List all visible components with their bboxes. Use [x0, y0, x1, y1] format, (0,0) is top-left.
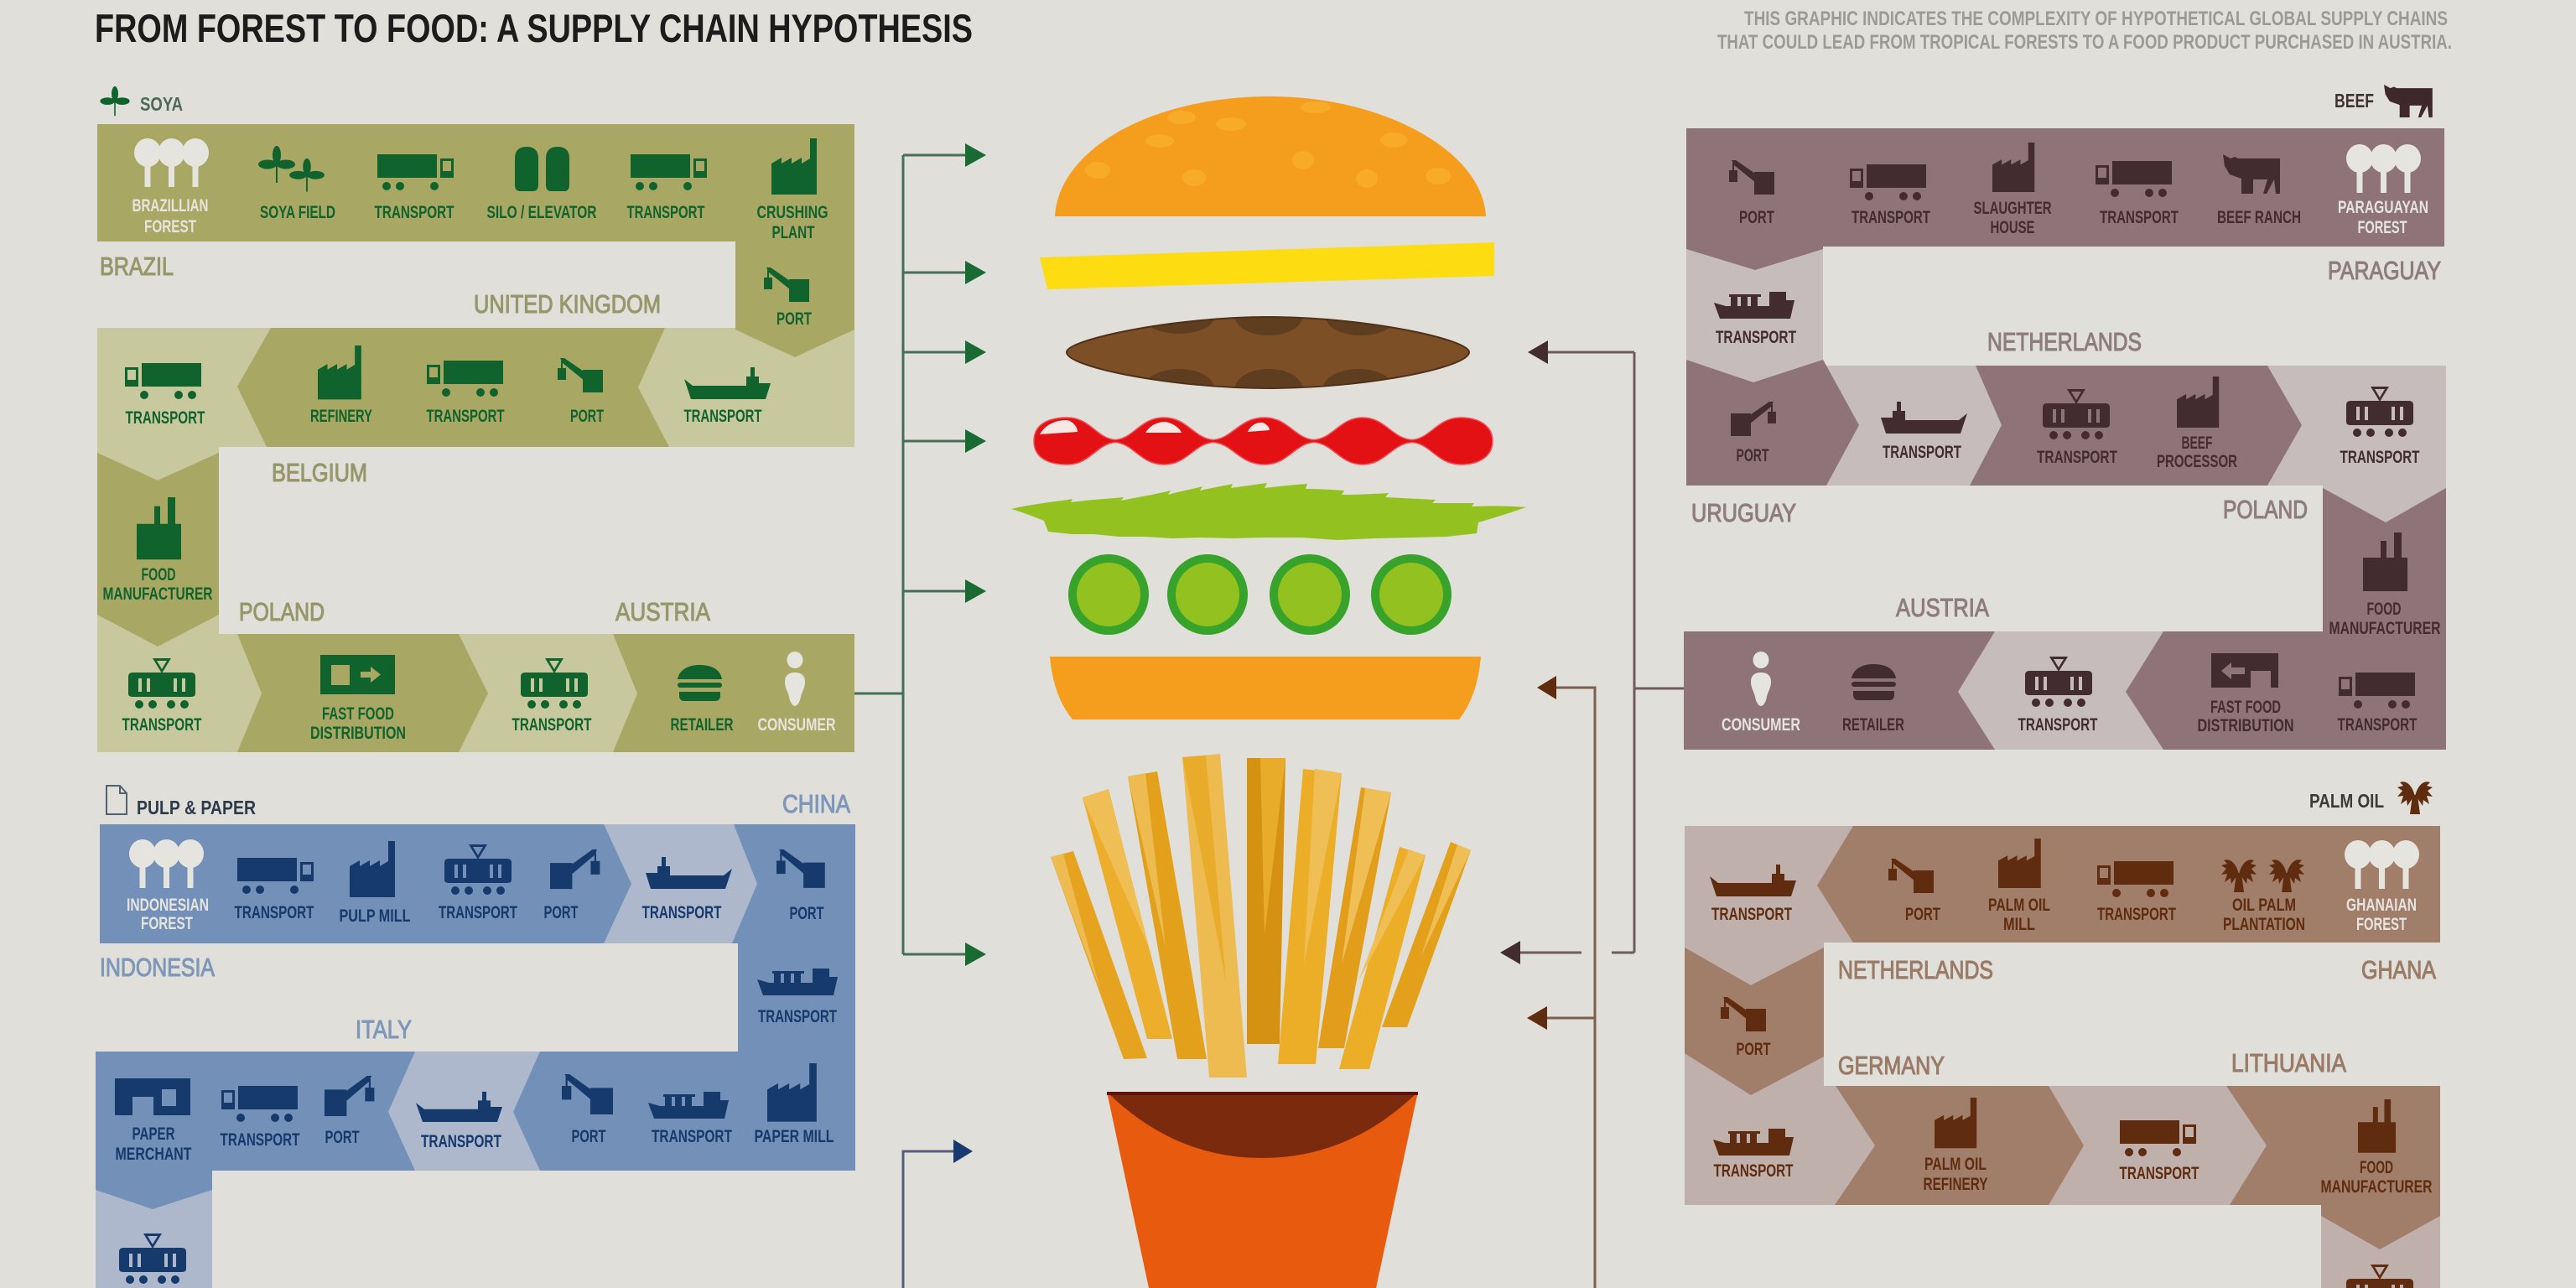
country: Austria: AUSTRIA: [1896, 593, 1989, 622]
step: oil palm plantation: PLANTATION: [2223, 915, 2305, 934]
step: transport truck: [2096, 161, 2179, 227]
step: fast food distribution: DISTRIBUTION: [2197, 716, 2294, 735]
step: port: [543, 849, 600, 922]
bottom bun: [1050, 657, 1481, 719]
pulp and paper heading: PULP & PAPER: [137, 797, 256, 818]
step: Brazillian forest: BRAZILLIAN: [132, 196, 208, 216]
step: transport truck: TRANSPORT: [1852, 208, 1930, 227]
step: refinery: REFINERY: [310, 407, 372, 426]
step: transport cargo ship: TRANSPORT: [1716, 328, 1796, 347]
country: China: CHINA: [782, 789, 850, 818]
step: transport truck: [2120, 1120, 2199, 1183]
step: food manufacturer: [102, 497, 213, 604]
illustration: exploded burger: [1011, 96, 1526, 719]
step: Ghanaian forest: GHANAIAN: [2346, 896, 2417, 915]
step: crushing plant: PLANT: [771, 223, 815, 242]
step: oil palm plantation: [2221, 860, 2305, 934]
step: transport train: [119, 1233, 186, 1284]
step: Ghanaian forest: [2345, 840, 2419, 934]
step: port: PORT: [1739, 208, 1774, 227]
step: paper mill: PAPER MILL: [755, 1127, 834, 1146]
step: transport ship: TRANSPORT: [684, 407, 762, 426]
step: paper merchant: PAPER: [132, 1124, 174, 1144]
step: fast food distribution: FAST FOOD: [2210, 698, 2281, 717]
beef ribbon: [1684, 128, 2446, 750]
step: Paraguayan forest: [2338, 144, 2428, 237]
step: food manufacturer: MANUFACTURER: [2329, 619, 2440, 638]
country: Netherlands: NETHERLANDS: [1838, 955, 1993, 984]
step: silo / elevator: SILO / ELEVATOR: [486, 203, 597, 222]
step: slaughter house: [1974, 143, 2051, 237]
step: Paraguayan forest: PARAGUAYAN: [2338, 198, 2428, 217]
step: Indonesian forest: FOREST: [141, 914, 193, 933]
step: transport cargo ship: [1713, 1129, 1794, 1181]
cheese: [1040, 242, 1494, 289]
step: beef processor: [2157, 377, 2237, 471]
country: Poland: POLAND: [2223, 495, 2308, 524]
step: transport train: [2018, 657, 2098, 735]
step: port: PORT: [543, 903, 579, 922]
step: port: [558, 358, 604, 426]
step: food manufacturer: MANUFACTURER: [2321, 1177, 2432, 1197]
palm oil connector with arrows: [1527, 676, 1595, 1288]
step: paper merchant: MERCHANT: [116, 1145, 192, 1164]
country: Belgium: BELGIUM: [272, 458, 367, 487]
step: palm oil mill: [1988, 839, 2050, 934]
step: port: PORT: [776, 309, 812, 329]
step: transport train: [439, 844, 517, 922]
step: Brazillian forest: FOREST: [144, 217, 196, 236]
step: pulp mill: [339, 841, 411, 926]
ketchup: [1034, 418, 1493, 465]
step: retailer: RETAILER: [671, 715, 733, 735]
step: transport cargo ship: TRANSPORT: [758, 1007, 837, 1026]
step: transport train: [512, 658, 592, 735]
step: port: [1731, 402, 1776, 465]
lettuce: [1011, 483, 1526, 540]
soya ribbon: [97, 124, 854, 752]
step: fast food distribution: [310, 655, 406, 743]
step: transport truck: [235, 858, 314, 922]
step: transport ship: [416, 1092, 502, 1151]
step: beef processor: PROCESSOR: [2157, 452, 2237, 471]
step: transport ship: TRANSPORT: [1711, 905, 1792, 924]
step: transport truck: TRANSPORT: [126, 408, 205, 428]
top bun: [1055, 96, 1486, 216]
step: consumer: [758, 652, 835, 735]
step: retailer: RETAILER: [1842, 715, 1904, 735]
step: transport ship: TRANSPORT: [1883, 443, 1961, 462]
step: paper mill: [755, 1063, 834, 1146]
palm oil heading: PALM OIL: [2309, 790, 2384, 812]
step: transport train: [122, 658, 202, 735]
step: port: [562, 1074, 613, 1146]
step: transport train: TRANSPORT: [512, 715, 592, 735]
step: Brazillian forest: [132, 138, 209, 236]
step: transport train: TRANSPORT: [2018, 715, 2098, 735]
country: Ghana: GHANA: [2361, 955, 2436, 984]
step: transport truck: [220, 1086, 300, 1150]
step: transport cargo ship: [648, 1092, 732, 1146]
step: port: [764, 267, 812, 329]
step: transport train: TRANSPORT: [439, 903, 517, 922]
beef connector with arrows: [1500, 340, 1684, 964]
step: beef processor: BEEF: [2182, 434, 2213, 453]
step: oil palm plantation: OIL PALM: [2232, 896, 2296, 915]
step: transport ship: [1881, 402, 1967, 462]
country: Germany: GERMANY: [1838, 1051, 1945, 1080]
step: port: [776, 849, 825, 923]
step: transport truck: TRANSPORT: [220, 1130, 300, 1150]
step: palm oil refinery: PALM OIL: [1924, 1155, 1987, 1174]
step: palm oil mill: PALM OIL: [1988, 896, 2050, 915]
step: transport truck: TRANSPORT: [2120, 1164, 2199, 1183]
step: retailer: [1842, 664, 1904, 735]
step: transport truck: TRANSPORT: [2097, 905, 2176, 924]
country: Poland: POLAND: [239, 597, 325, 626]
country: Brazil: BRAZIL: [100, 252, 174, 281]
soya heading: [100, 86, 183, 116]
step: transport truck: TRANSPORT: [426, 407, 505, 426]
step: port: PORT: [572, 1127, 606, 1146]
step: silo / elevator: [486, 147, 597, 222]
step: transport train: TRANSPORT: [122, 715, 202, 735]
step: transport truck: [627, 154, 707, 222]
step: transport train: [2340, 387, 2420, 467]
step: retailer: [671, 665, 733, 735]
country: Uruguay: URUGUAY: [1691, 498, 1796, 527]
step: transport train: TRANSPORT: [2340, 448, 2420, 467]
country: Italy: ITALY: [356, 1015, 412, 1044]
step: transport cargo ship: TRANSPORT: [1714, 1161, 1794, 1181]
step: beef ranch: [2217, 154, 2301, 227]
step: port: [1721, 997, 1771, 1059]
palm oil ribbon: [1685, 826, 2440, 1288]
step: port: PORT: [570, 407, 604, 426]
step: Ghanaian forest: FOREST: [2356, 915, 2407, 934]
pickles: [1068, 554, 1452, 635]
step: port: [325, 1076, 374, 1147]
step: Indonesian forest: [127, 839, 209, 933]
step: transport truck: TRANSPORT: [374, 203, 454, 222]
step: port: [1729, 160, 1774, 227]
step: consumer: [1722, 652, 1800, 735]
pulp connector with arrow: [903, 1140, 973, 1288]
country: Indonesia: INDONESIA: [100, 953, 215, 982]
panel: palm oil supply chain: [1685, 782, 2440, 1288]
step: transport train: [2346, 1265, 2413, 1288]
step: transport truck: [426, 361, 505, 426]
step: Paraguayan forest: FOREST: [2358, 218, 2407, 237]
step: transport ship: TRANSPORT: [642, 903, 722, 922]
step: transport train: TRANSPORT: [2037, 448, 2117, 467]
step: transport ship: TRANSPORT: [421, 1132, 501, 1151]
step: port: PORT: [1736, 446, 1769, 465]
fries carton: [1107, 1092, 1418, 1288]
fry strips: [1051, 754, 1471, 1078]
step: soya field: SOYA FIELD: [260, 203, 335, 222]
soya heading: SOYA: [140, 93, 183, 115]
panel: soya supply chain: [97, 86, 854, 752]
step: food manufacturer: [2321, 1099, 2432, 1197]
step: transport cargo ship: [757, 969, 838, 1026]
country: Netherlands: NETHERLANDS: [1987, 327, 2142, 356]
step: food manufacturer: FOOD: [2360, 1158, 2393, 1177]
title: FROM FOREST TO FOOD: A SUPPLY CHAIN HYPOTHESIS: [95, 6, 973, 50]
step: transport truck: [1850, 164, 1930, 227]
country: Lithuania: LITHUANIA: [2231, 1048, 2346, 1078]
step: transport truck: TRANSPORT: [627, 203, 705, 222]
country: Paraguay: PARAGUAY: [2328, 256, 2441, 285]
step: transport train: [2037, 389, 2117, 467]
panel: beef supply chain: [1684, 85, 2446, 750]
step: paper merchant: [115, 1078, 192, 1164]
step: Indonesian forest: INDONESIAN: [127, 896, 209, 915]
step: consumer: CONSUMER: [1722, 715, 1800, 735]
step: fast food distribution: FAST FOOD: [322, 704, 394, 724]
step: transport ship: [684, 367, 771, 426]
step: palm oil refinery: [1924, 1098, 1987, 1194]
step: transport truck: TRANSPORT: [235, 903, 314, 922]
patty: [1066, 316, 1470, 389]
country: United Kingdom: UNITED KINGDOM: [474, 289, 661, 319]
step: crushing plant: CRUSHING: [756, 203, 828, 222]
step: food manufacturer: [2329, 532, 2440, 638]
intro text: [1717, 8, 2452, 54]
step: transport truck: [2338, 673, 2418, 735]
step: transport cargo ship: TRANSPORT: [652, 1127, 732, 1146]
step: refinery: [310, 345, 372, 426]
palm oil heading: [2309, 782, 2433, 814]
step: beef ranch: BEEF RANCH: [2217, 208, 2301, 227]
step: transport truck: [2097, 861, 2176, 924]
step: consumer: CONSUMER: [758, 715, 835, 735]
panel: pulp and paper supply chain: [96, 786, 855, 1288]
country: Austria: AUSTRIA: [615, 597, 710, 626]
step: food manufacturer: FOOD: [141, 565, 176, 584]
step: pulp mill: PULP MILL: [339, 906, 411, 926]
step: palm oil mill: MILL: [2003, 915, 2035, 934]
beef heading: BEEF: [2334, 90, 2374, 112]
step: transport cargo ship: [1714, 292, 1796, 347]
step: transport ship: [1710, 865, 1796, 924]
pulp ribbon: [96, 824, 855, 1288]
illustration: fries: [1051, 754, 1471, 1288]
step: transport truck: TRANSPORT: [2100, 208, 2179, 227]
step: transport ship: [642, 857, 732, 922]
step: fast food distribution: DISTRIBUTION: [310, 724, 406, 743]
step: food manufacturer: MANUFACTURER: [102, 584, 213, 604]
step: port: [1888, 859, 1940, 924]
step: soya field: [258, 146, 335, 222]
step: transport truck: [125, 363, 205, 428]
step: crushing plant: [756, 138, 828, 242]
step: transport truck: [374, 154, 454, 222]
step: port: PORT: [325, 1128, 360, 1147]
pulp and paper heading: [106, 786, 256, 818]
beef heading: [2334, 85, 2433, 117]
soya connector with arrows: [854, 143, 986, 966]
step: port: PORT: [790, 904, 824, 923]
step: slaughter house: SLAUGHTER: [1974, 199, 2051, 218]
step: transport truck: TRANSPORT: [2338, 715, 2418, 735]
step: fast food distribution: [2197, 653, 2294, 735]
step: port: PORT: [1736, 1040, 1771, 1059]
step: slaughter house: HOUSE: [1991, 218, 2034, 237]
step: port: PORT: [1905, 905, 1940, 924]
step: palm oil refinery: REFINERY: [1924, 1175, 1987, 1194]
step: food manufacturer: FOOD: [2366, 600, 2402, 619]
